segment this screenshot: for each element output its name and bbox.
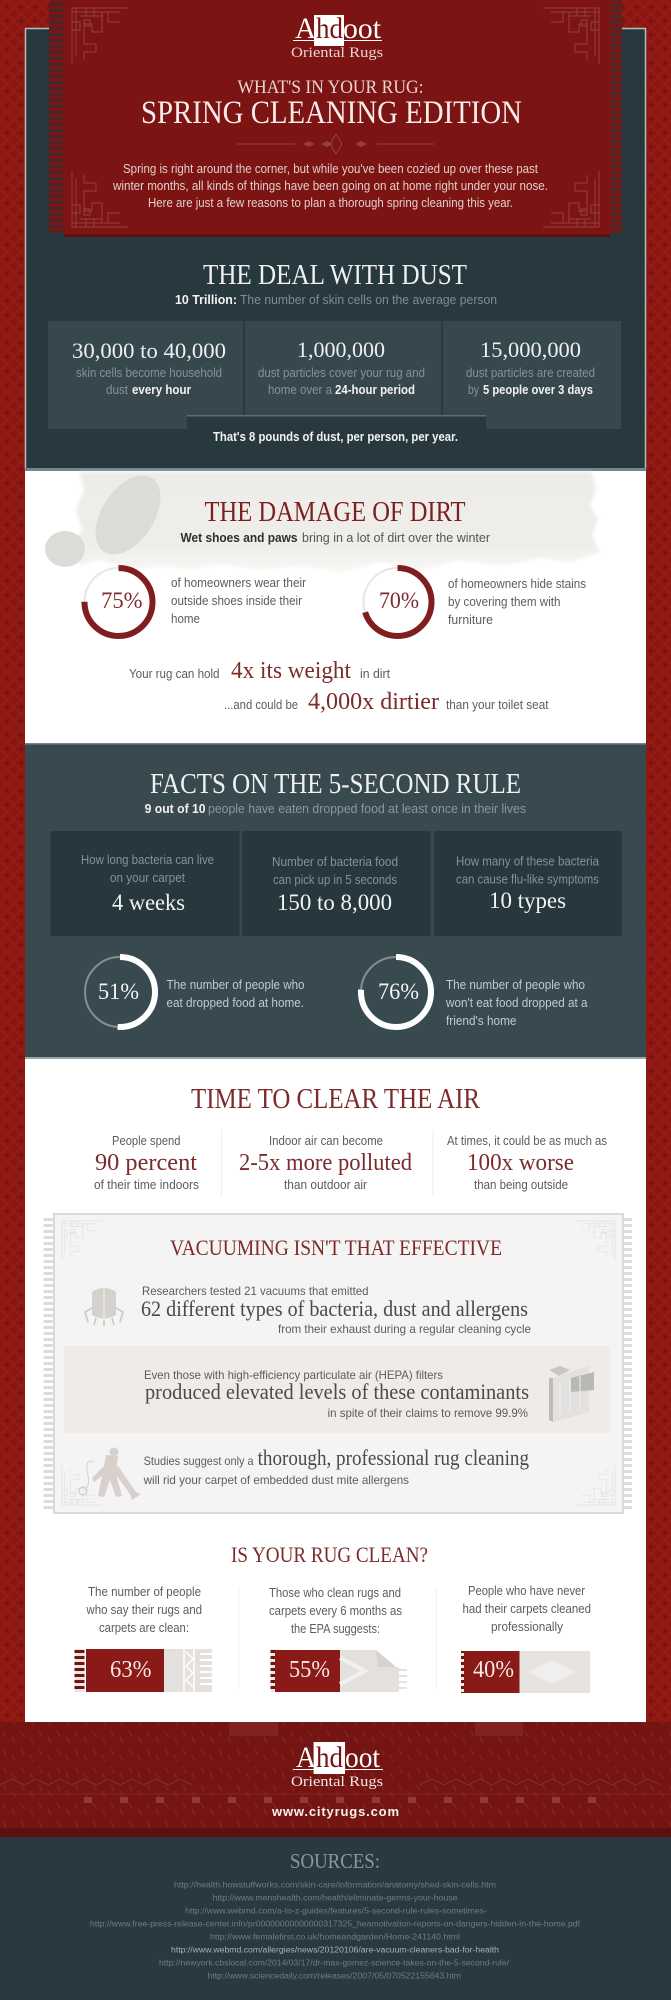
- text: outside shoes: [171, 576, 306, 626]
- logo: Ahdoot Oriental Rugs: A: [295, 12, 316, 45]
- heading: facts on the 5-second rule: FACTS ON THE 5-SECOND RULE: [150, 769, 521, 800]
- rug chart: 40%: [461, 1651, 590, 1693]
- stat box: 4 weeks: How long bacteria can live: [81, 853, 214, 867]
- text: never cleaned: professionally: [491, 1620, 564, 1634]
- donut chart: 51%: [85, 957, 155, 1027]
- stat box: 1,000,000: home over a: [268, 383, 332, 397]
- stat: 4x its weight: in dirt: [360, 667, 391, 681]
- source links: http://www.menshealth.com/health/eliminate-germs-your-house: [212, 1894, 458, 1903]
- source links: http://www.sciencedaily.com/releases/2007/05/070522155643.htm: [208, 1972, 461, 1981]
- text: say rugs are clean: who say their rugs and: [85, 1603, 202, 1617]
- stat: 4,000x dirtier: than your toilet seat: [446, 698, 549, 712]
- logo: Ahdoot Oriental Rugs: [291, 12, 383, 61]
- stat box: 4 weeks: 4 weeks: [112, 890, 185, 915]
- icon: shoe print: [45, 464, 174, 567]
- source links: http://www.webmd.com/a-to-z-guides/features/5-second-rule-rules-sometimes-: [185, 1907, 487, 1916]
- panel: the deal with dust: [25, 28, 646, 471]
- title: SPRING CLEANING EDITION: [141, 95, 522, 131]
- panel: facts on the 5-second rule: [25, 743, 646, 1059]
- text: never cleaned: [462, 1584, 591, 1634]
- text: hide stains: furniture: [448, 613, 493, 627]
- stat: 100x worse: [447, 1134, 607, 1192]
- ornament: banner corners: [72, 8, 599, 227]
- website: www.cityrugs.com: [271, 1804, 399, 1819]
- stat box: 30,000 to 40,000: skin cells become household: [76, 366, 222, 380]
- callout: 8 pounds of dust: [187, 415, 486, 444]
- stat box: 15,000,000: [443, 321, 621, 429]
- heading: the damage of dirt: THE DAMAGE OF DIRT: [204, 497, 466, 528]
- stat: 4x its weight: Your rug can hold: [129, 667, 220, 681]
- donut chart: 75%: 75%: [101, 588, 142, 613]
- icon: rug cleaner with vacuum: [79, 1448, 141, 1500]
- heading: vacuuming isn't that effective: VACUUMING ISN'T THAT EFFECTIVE: [170, 1235, 502, 1260]
- rug chart: 55%: 55%: [289, 1657, 330, 1683]
- icon: HEPA filter: [549, 1366, 594, 1422]
- stat: 90 percent: of their time indoors: [94, 1178, 199, 1192]
- stat: 4,000x dirtier: ...and could be: [224, 698, 298, 712]
- text: 62 different types: 62 different types of bacteria, dust and allergens: [141, 1296, 528, 1321]
- stat: 2-5x more polluted: [239, 1134, 412, 1192]
- logo: footer Ahdoot Oriental Rugs: Oriental Rugs: [291, 1774, 383, 1790]
- text: professional rug cleaning: Studies suggest only a: [144, 1454, 254, 1468]
- stat: 90 percent: People spend: [112, 1134, 181, 1148]
- title: WHAT'S IN YOUR RUG:: [238, 77, 424, 98]
- subheading: 9 out of 10: 9 out of 10: [145, 802, 206, 816]
- panel: sources: [0, 1837, 671, 2000]
- intro paragraph: Here are just a few reasons to plan a thorough spring cleaning this year.: [148, 196, 513, 210]
- text: 62 different types: from their exhaust during a regular cleaning cycle: [278, 1322, 531, 1336]
- donut chart: 70%: 70%: [379, 588, 419, 613]
- intro paragraph: Spring is right around the corner, but while you've been cozied up over these past: [123, 162, 538, 176]
- stat: 90 percent: [94, 1134, 199, 1192]
- panel: title banner: [49, 0, 622, 237]
- logo: footer Ahdoot Oriental Rugs: A: [296, 1741, 316, 1774]
- text: 62 different types: [141, 1284, 531, 1336]
- text: hide stains: of homeowners hide stains: [448, 577, 586, 591]
- rug chart: 55%: [270, 1649, 407, 1692]
- stat box: 10 types: How many of these bacteria: [456, 855, 599, 869]
- text: elevated levels: Even those with high-efficiency particulate air (HEPA) filters: [144, 1368, 443, 1382]
- subheading: 9 out of 10: people have eaten dropped food at least once in their lives: [208, 802, 526, 816]
- stat box: 30,000 to 40,000: 30,000 to 40,000: [72, 338, 226, 363]
- stat: 4,000x dirtier: [224, 689, 549, 715]
- stat box: 15,000,000: dust particles are created: [466, 366, 595, 380]
- stat: 100x worse: At times, it could be as much as: [447, 1134, 607, 1148]
- stat box: 10 types: [434, 831, 622, 936]
- subheading: wet shoes and paws: Wet shoes and paws: [180, 531, 298, 545]
- text: say rugs are clean: [85, 1585, 202, 1635]
- subheading: wet shoes and paws: [180, 531, 490, 545]
- text: friend's home: won't eat food dropped at a: [445, 996, 588, 1010]
- title: [141, 77, 522, 131]
- icon: dust mite: [85, 1288, 123, 1326]
- stat box: 1,000,000: 24-hour period: [335, 383, 415, 397]
- text: professional rug cleaning: will rid your carpet of embedded dust mite allergens: [143, 1473, 409, 1487]
- text: 62 different types: Researchers tested 21 vacuums that emitted: [142, 1284, 368, 1298]
- text: eat dropped food at home: [166, 978, 305, 1010]
- text: professional rug cleaning: [143, 1445, 529, 1487]
- stat box: 4 weeks: on your carpet: [110, 871, 185, 885]
- text: friend's home: The number of people who: [446, 978, 585, 992]
- stat box: 1,000,000: 1,000,000: [297, 337, 385, 362]
- source links: http://www.free-press-release-center.info/pr00000000000000317325_heamotivation-reports-on-dangers-hidden-in-the-home.pdf: [90, 1920, 581, 1929]
- text: eat dropped food at home: The number of people who: [166, 978, 305, 992]
- text: friend's home: [445, 978, 588, 1028]
- source links: http://health.howstuffworks.com/skin-care/information/anatomy/shed-skin-cells.htm: [174, 1880, 496, 1889]
- stat: 90 percent: 90 percent: [95, 1150, 197, 1176]
- panel: clear the air, vacuuming, rug clean: [25, 1059, 646, 1722]
- panel: footer: [0, 1722, 671, 1837]
- text: elevated levels: produced elevated levels of these contaminants: [145, 1379, 529, 1404]
- logo: Ahdoot Oriental Rugs: Oriental Rugs: [291, 45, 383, 61]
- stat box: 15,000,000: 5 people over 3 days: [483, 383, 593, 397]
- text: outside shoes: of homeowners wear their: [171, 576, 306, 590]
- donut chart: 70%: [364, 568, 432, 636]
- text: never cleaned: had their carpets cleaned: [462, 1602, 591, 1616]
- stat: 2-5x more polluted: Indoor air can become: [269, 1134, 383, 1148]
- rug chart: 40%: 40%: [473, 1657, 514, 1683]
- stat: 100x worse: than being outside: [474, 1178, 568, 1192]
- stat box: 30,000 to 40,000: dust: [106, 383, 128, 397]
- stat box: 4 weeks: [50, 831, 240, 936]
- heading: the deal with dust: THE DEAL WITH DUST: [203, 260, 467, 291]
- text: hide stains: [448, 577, 586, 627]
- donut chart: 75%: [84, 568, 152, 636]
- text: elevated levels: [144, 1368, 529, 1420]
- heading: sources: SOURCES:: [290, 1849, 380, 1873]
- source links: http://www.femalefirst.co.uk/homeandgarden/Home-241140.html: [210, 1933, 460, 1942]
- text: outside shoes: outside shoes inside their: [171, 594, 302, 608]
- band behind second row: [64, 1346, 610, 1433]
- text: say rugs are clean: The number of people: [88, 1585, 201, 1599]
- source links: http://www.webmd.com/allergies/news/20120106/are-vacuum-cleaners-bad-for-health: [171, 1946, 499, 1955]
- intro paragraph: winter months, all kinds of things have been going on at home right under your nose.: [112, 179, 548, 193]
- stat: 100x worse: 100x worse: [467, 1150, 574, 1176]
- stat box: 150 to 8,000: [242, 831, 430, 936]
- callout: 8 pounds of dust: That's 8 pounds of dust, per person, per year.: [213, 430, 458, 444]
- stat box: 1,000,000: dust particles cover your rug and: [258, 366, 425, 380]
- ornament: title divider: [237, 134, 434, 154]
- stat box: 1,000,000: [245, 321, 441, 429]
- stat box: 10 types: can cause flu-like symptoms: [456, 873, 599, 887]
- text: every 6 months: carpets every 6 months as: [269, 1604, 402, 1618]
- stat box: 150 to 8,000: 150 to 8,000: [277, 890, 392, 915]
- brush stroke background: [70, 472, 600, 572]
- stat: 2-5x more polluted: 2-5x more polluted: [239, 1150, 412, 1176]
- rug chart: 63%: 63%: [110, 1657, 152, 1683]
- text: elevated levels: in spite of their claims to remove 99.9%: [328, 1406, 528, 1420]
- stat box: 30,000 to 40,000: [48, 321, 243, 429]
- logo: footer Ahdoot Oriental Rugs: [291, 1741, 383, 1790]
- subheading: 10 trillion: 10 Trillion:: [175, 293, 237, 307]
- stat: 2-5x more polluted: than outdoor air: [284, 1178, 367, 1192]
- text: say rugs are clean: carpets are clean:: [99, 1621, 189, 1635]
- text: outside shoes: home: [171, 612, 200, 626]
- subheading: wet shoes and paws: bring in a lot of dirt over the winter: [302, 531, 490, 545]
- text: eat dropped food at home: eat dropped food at home.: [166, 996, 304, 1010]
- donut chart: 76%: [361, 957, 431, 1027]
- logo: Ahdoot Oriental Rugs: hd: [316, 12, 343, 45]
- source links: http://newyork.cbslocal.com/2014/03/17/dr-max-gomez-science-takes-on-the-5-second-rule/: [159, 1959, 510, 1968]
- stat: 4x its weight: 4x its weight: [231, 658, 351, 684]
- stat box: 150 to 8,000: Number of bacteria food: [272, 855, 398, 869]
- heading: is your rug clean: IS YOUR RUG CLEAN?: [231, 1542, 428, 1567]
- stat box: 30,000 to 40,000: every hour: [132, 383, 191, 397]
- ornament: card corners: [62, 1221, 615, 1505]
- text: every 6 months: the EPA suggests:: [291, 1622, 380, 1636]
- stat box: 10 types: 10 types: [489, 888, 566, 913]
- text: professional rug cleaning: thorough, professional rug cleaning: [258, 1445, 529, 1470]
- stat box: 15,000,000: 15,000,000: [480, 337, 581, 362]
- text: hide stains: by covering them with: [448, 595, 561, 609]
- stat box: 150 to 8,000: can pick up in 5 seconds: [273, 873, 397, 887]
- subheading: 10 trillion: The number of skin cells on the average person: [240, 293, 497, 307]
- stat: 4,000x dirtier: 4,000x dirtier: [308, 689, 439, 715]
- panel: the damage of dirt: [25, 464, 646, 743]
- donut chart: 51%: 51%: [98, 979, 139, 1004]
- intro paragraph: [112, 162, 548, 210]
- logo: footer Ahdoot Oriental Rugs: hd: [316, 1741, 343, 1774]
- text: every 6 months: Those who clean rugs and: [269, 1586, 401, 1600]
- stat box: 15,000,000: by: [468, 383, 480, 397]
- text: never cleaned: People who have never: [468, 1584, 585, 1598]
- rug chart: 63%: [74, 1649, 212, 1692]
- text: every 6 months: [269, 1586, 402, 1636]
- stat: 4x its weight: [129, 658, 391, 684]
- source links: [90, 1880, 581, 1981]
- text: friend's home: friend's home: [446, 1014, 517, 1028]
- panel: vacuuming rug card: [44, 1214, 632, 1513]
- logo: footer Ahdoot Oriental Rugs: oot: [345, 1741, 381, 1774]
- donut chart: 76%: 76%: [378, 979, 419, 1004]
- heading: time to clear the air: TIME TO CLEAR THE AIR: [191, 1084, 480, 1115]
- logo: Ahdoot Oriental Rugs: oot: [343, 12, 382, 45]
